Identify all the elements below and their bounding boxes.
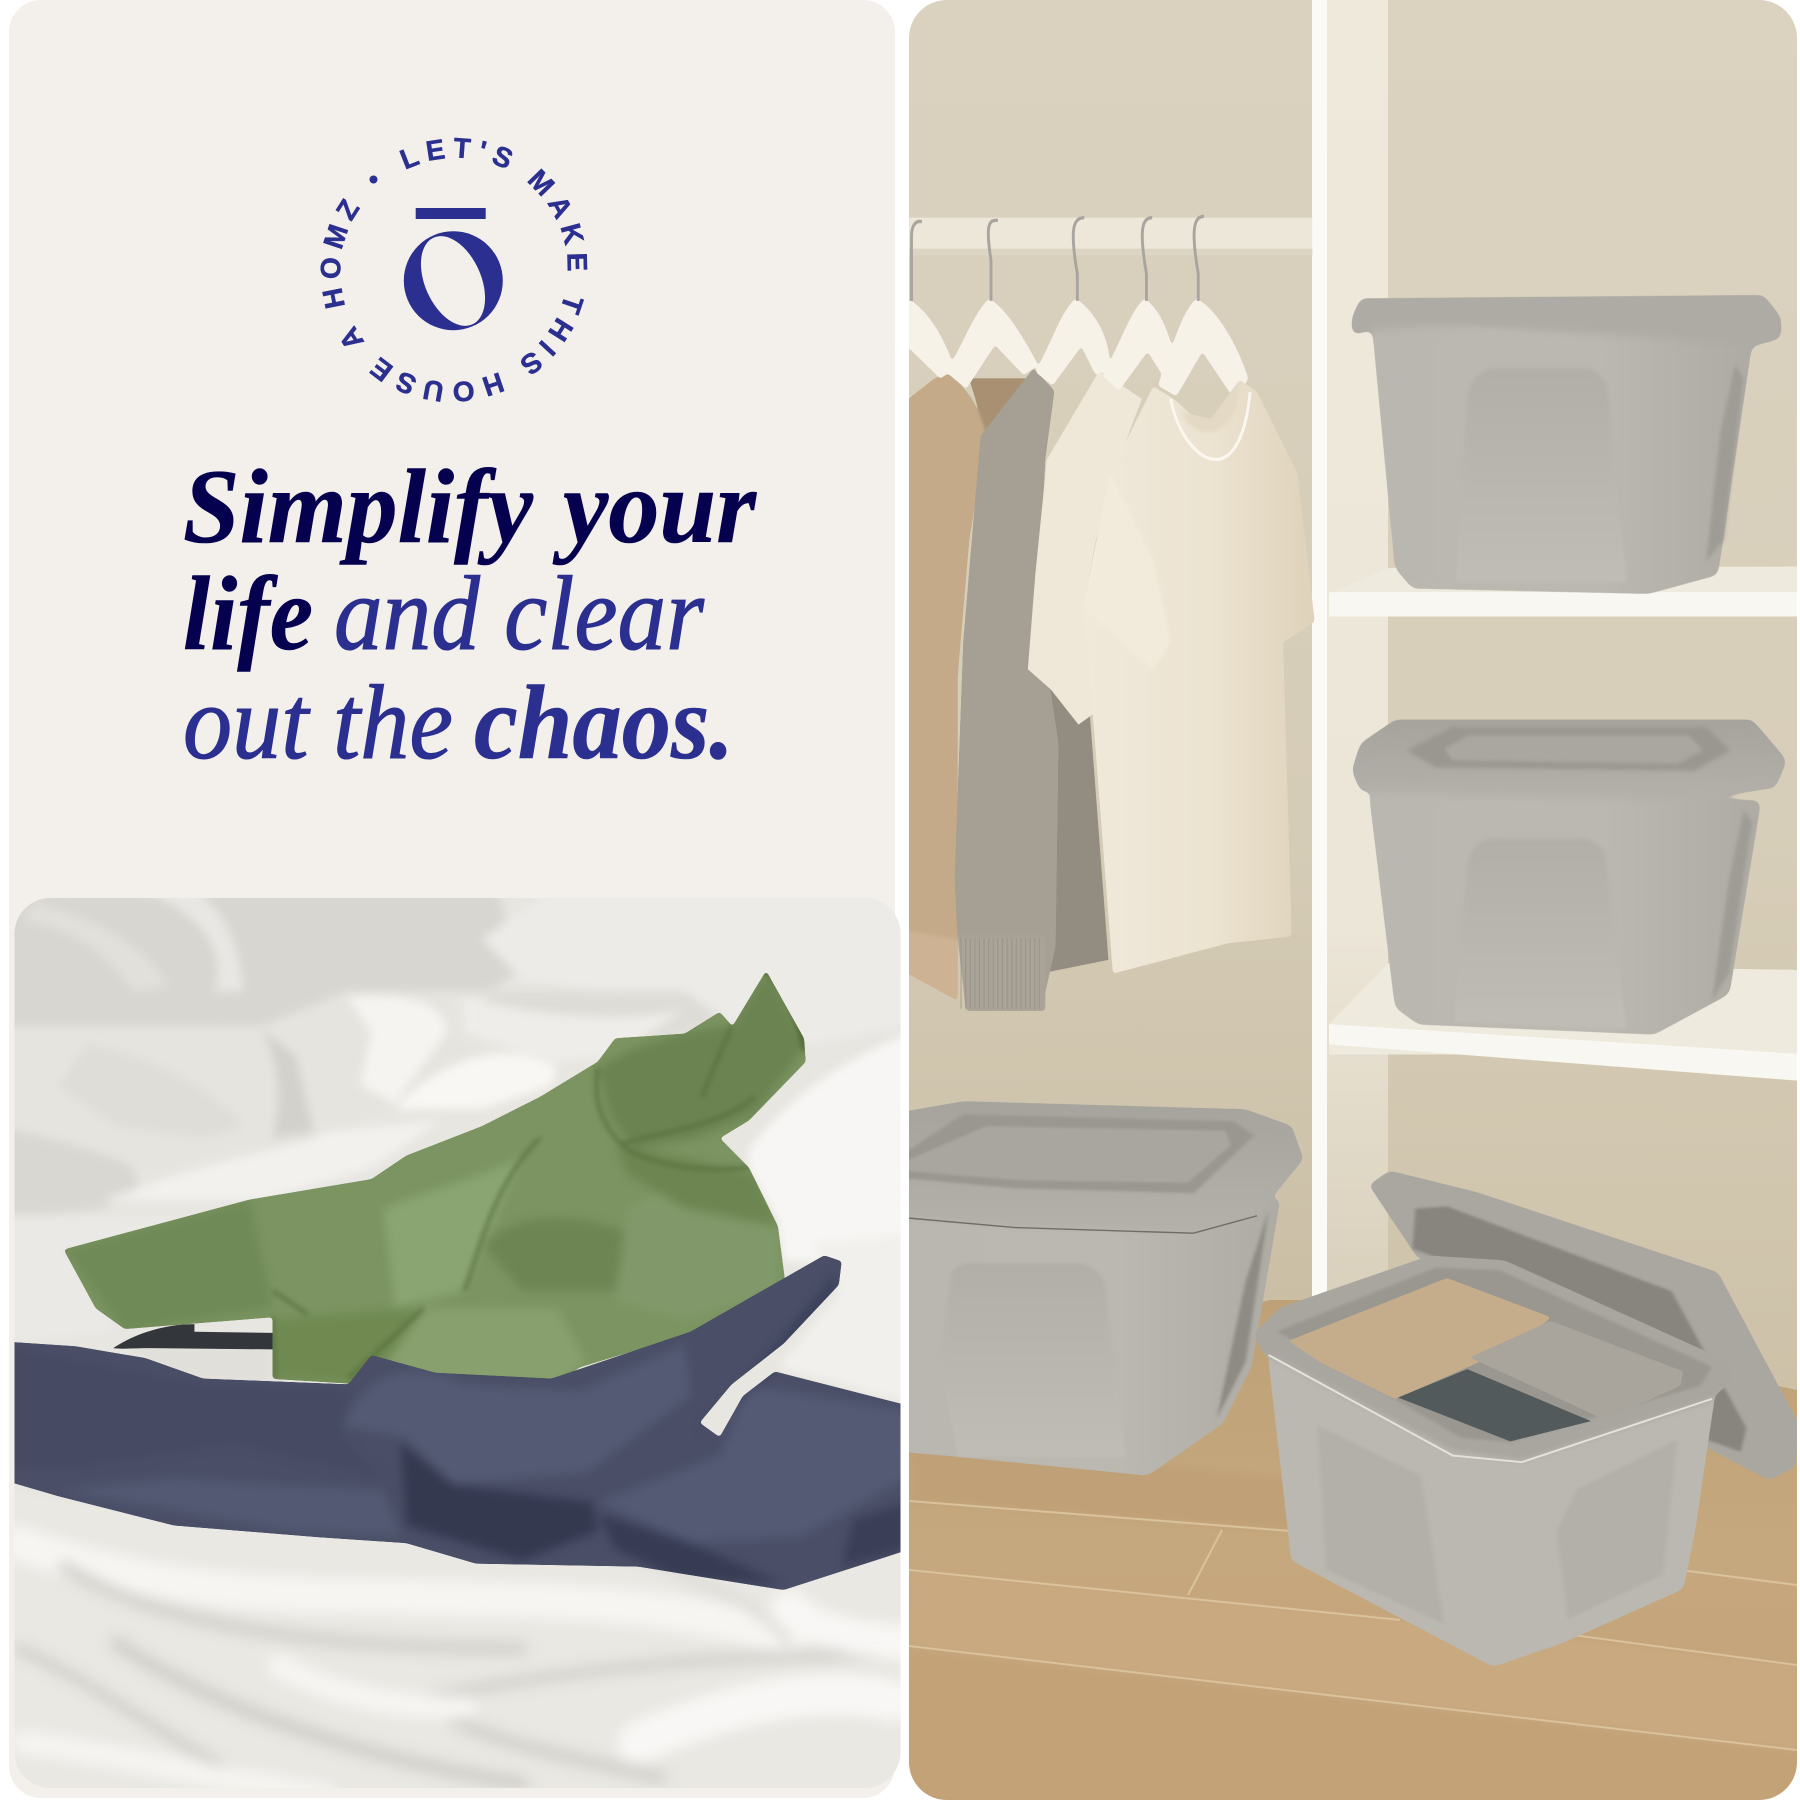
bin 3 side handle (1217, 1211, 1269, 1419)
shelf 1 (1329, 566, 1800, 617)
heading: Simplify your life and clear out the chaos: chaos. (474, 664, 734, 781)
navy pants (0, 1255, 929, 1590)
floor board lines (909, 1501, 1797, 1750)
bin 4 interior (1277, 1268, 1712, 1442)
folded tan cloth (1289, 1278, 1551, 1399)
bin 3 lid inner panel (877, 1126, 1231, 1183)
hanger hooks (912, 216, 1204, 301)
floor (909, 1300, 1797, 1800)
black strap (113, 1324, 273, 1349)
bin 3 on floor (877, 1102, 1303, 1475)
photo: closet with storage bins (877, 0, 1800, 1800)
bin 1 on top shelf (1352, 295, 1781, 594)
photo: messy bed with clothes (0, 880, 929, 1800)
bin 3 lid inset (877, 1114, 1254, 1193)
lower closet contents (877, 1102, 1798, 1667)
upper closet contents (883, 216, 1800, 1082)
logo dot (370, 176, 378, 184)
bin 1 side handle (1706, 365, 1744, 561)
folded grey cloth (1470, 1321, 1683, 1420)
grey sweater (955, 368, 1058, 1011)
heading: Simplify your life and clear out the chaos: your (552, 448, 758, 565)
post: cream side face (1327, 0, 1388, 1320)
bin 1 recess (1478, 371, 1599, 382)
logo macron bar (416, 208, 486, 219)
bin 4 left recess (1317, 1426, 1444, 1624)
green t-shirt (64, 971, 807, 1385)
folded dark cloth (1398, 1369, 1591, 1441)
heading: Simplify your life and clear out the chaos: and clear (334, 555, 705, 672)
dark grey sweater behind (1050, 689, 1108, 972)
bed: sheets and pillows (0, 892, 929, 1800)
tan sweater (909, 374, 1026, 1000)
heading: Simplify your life and clear out the chaos (183, 448, 758, 781)
bin 2 lid inset (1407, 727, 1730, 771)
bin 3 recess (940, 1263, 1126, 1456)
bin 3 lid edge line (909, 1216, 1257, 1233)
bin 2 lid inner panel (1444, 735, 1703, 764)
heading: Simplify your life and clear out the chaos: out the (183, 664, 453, 781)
wall: left closet bay (909, 0, 1312, 1400)
heading: Simplify your life and clear out the chaos: Simplify (183, 448, 534, 565)
floor plank tones (909, 1764, 1797, 1800)
post: white front edge (1312, 0, 1327, 1300)
clothes rail (909, 218, 1312, 256)
bin 4 right recess (1556, 1440, 1677, 1619)
lid underside (1412, 1206, 1746, 1452)
panel: left beige card (9, 0, 895, 1798)
logo letter o (404, 226, 503, 336)
bin 2 recess (1480, 841, 1597, 850)
bin 2 side handle (1712, 811, 1752, 1000)
shelf 2 (1329, 963, 1800, 1082)
wall: right shelving bay (1388, 0, 1800, 1500)
hangers (894, 299, 1248, 400)
bin 2 on middle shelf (1352, 720, 1787, 1034)
logo ring text: LET'S MAKE THIS HOUSE A HOMZ (320, 138, 588, 402)
heading: Simplify your life and clear out the chaos: life (183, 555, 313, 672)
bin 4 rim highlight (1269, 1355, 1712, 1462)
cream t-shirt front (1083, 380, 1315, 973)
t-shirt collar line (1171, 392, 1250, 459)
logo: circular badge (320, 138, 588, 402)
sweater cuff ribs (960, 938, 1040, 1009)
open bin 4 (1254, 1256, 1732, 1667)
open lid of bin 4 (1369, 1171, 1798, 1480)
back cream t-shirt (1028, 372, 1142, 725)
